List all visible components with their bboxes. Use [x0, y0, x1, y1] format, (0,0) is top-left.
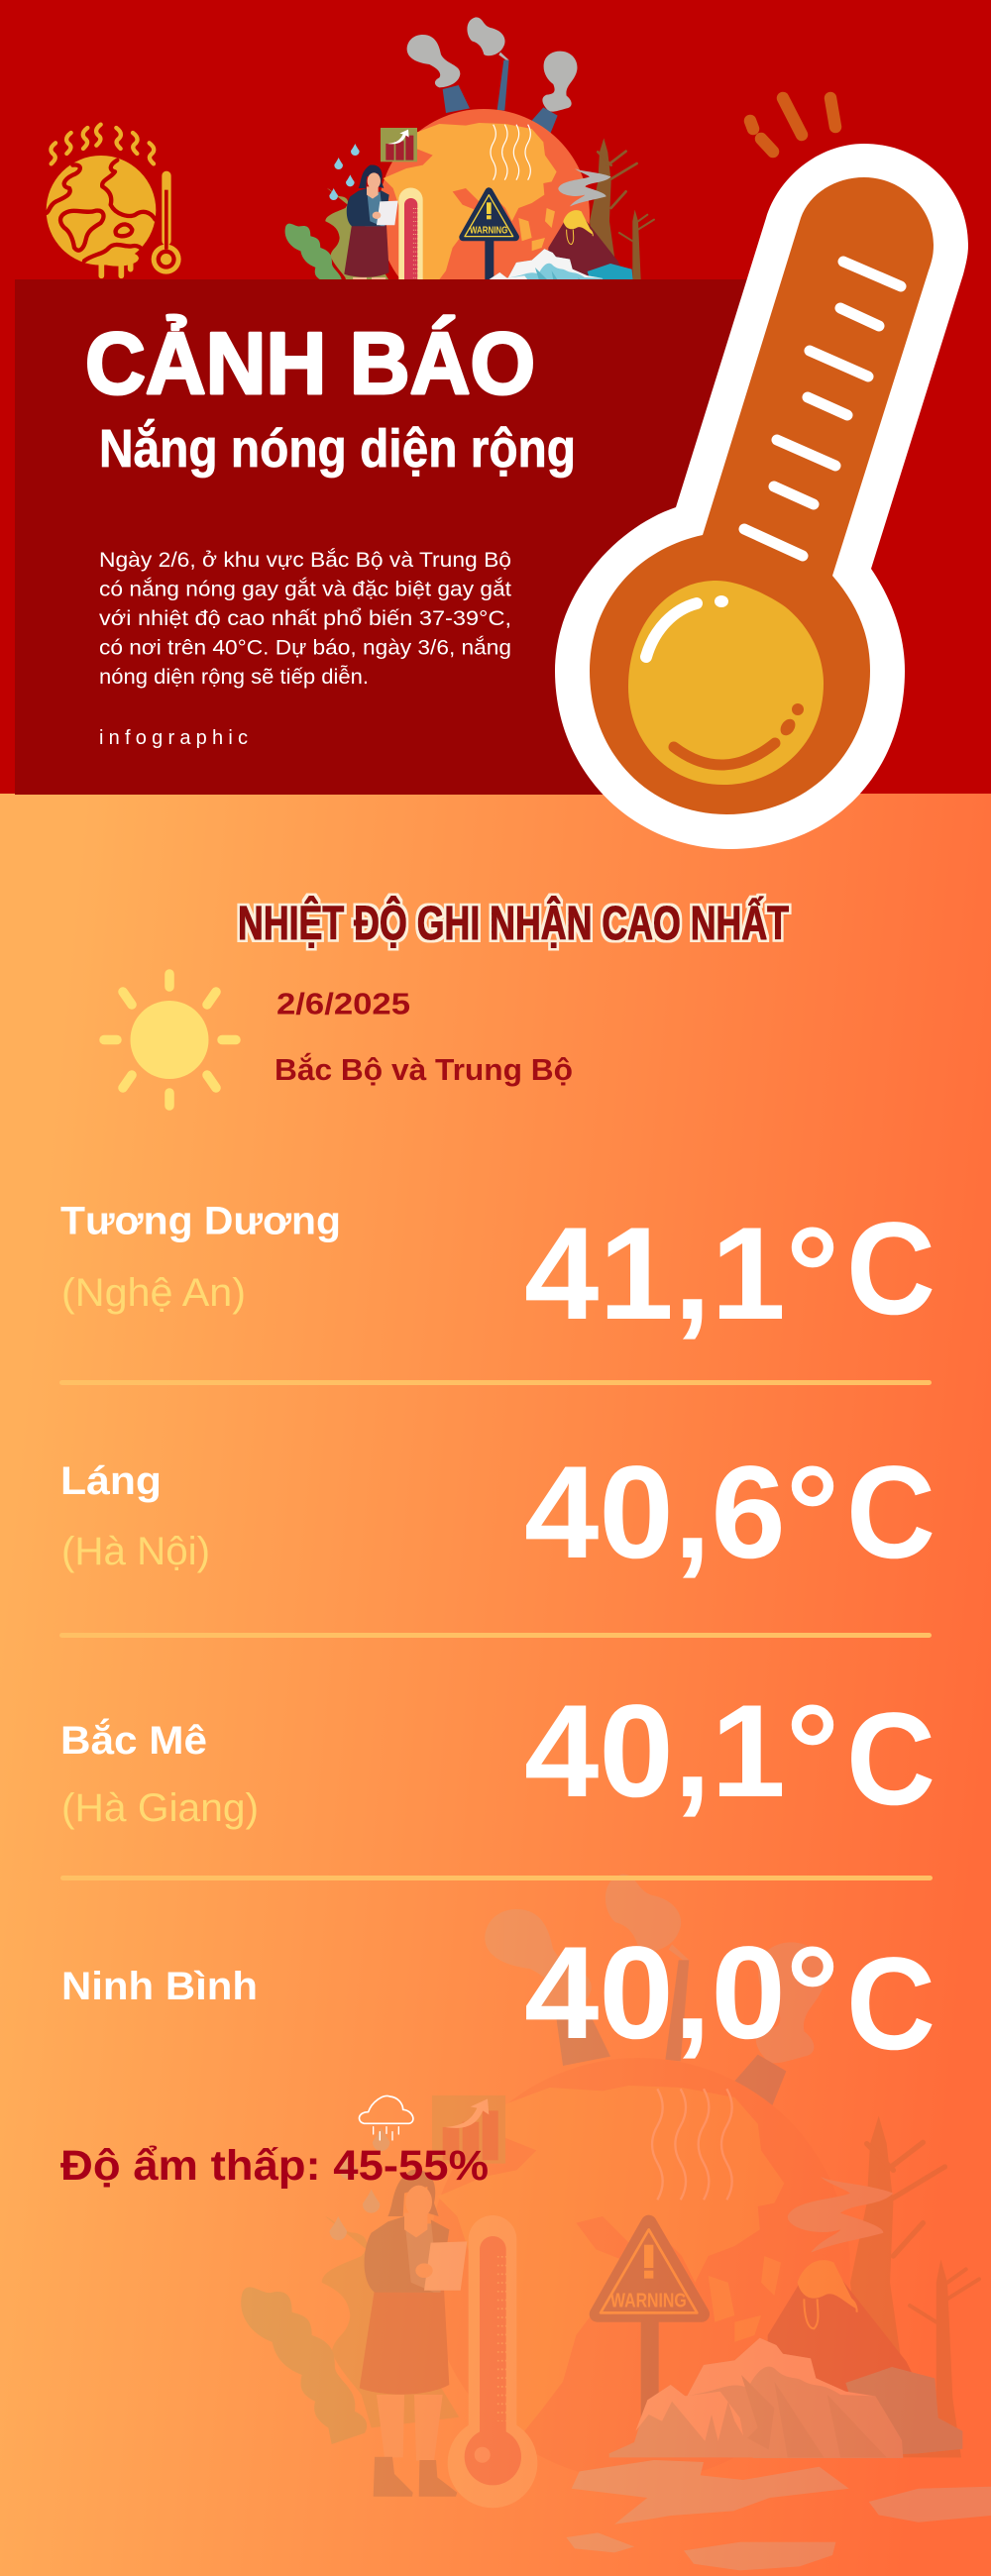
temperature unit: C: [846, 1196, 936, 1342]
water drops: [329, 144, 360, 200]
humidity note: Độ ẩm thấp: 45-55%: [60, 2142, 489, 2190]
thermometer white outline: [555, 144, 968, 849]
divider 2: [59, 1633, 932, 1638]
station name: Tương Dương: [60, 1199, 341, 1242]
panel: dark red intro: [15, 279, 773, 795]
small thermometer: [152, 171, 181, 274]
intro paragraph: nóng diện rộng sẽ tiếp diễn.: [99, 666, 369, 689]
row: Ninh Binh: [61, 1920, 936, 2078]
intro paragraph: Ngày 2/6, ở khu vực Bắc Bộ và Trung Bộ: [99, 549, 511, 572]
icon: melting globe with thermometer: [47, 125, 181, 275]
title: canh bao: CẢNH BÁO: [85, 314, 535, 412]
rising chart: [381, 128, 417, 161]
heat waves: [491, 125, 530, 180]
volcano smoke: [558, 168, 611, 206]
water puddles: [448, 310, 660, 366]
lower gradient background: [0, 794, 991, 2576]
temperature value: 41,1°: [524, 1201, 839, 1347]
intro paragraph: có nơi trên 40°C. Dự báo, ngày 3/6, nắng: [99, 636, 511, 660]
warning sign: [463, 191, 515, 304]
bulb highlights: [646, 595, 804, 765]
large thermometer: [388, 187, 433, 334]
icon: sun: [104, 974, 236, 1106]
station name: Bắc Mê: [60, 1717, 207, 1763]
volcano: [548, 210, 634, 294]
province: (Hà Giang): [61, 1786, 259, 1830]
province: (Nghệ An): [61, 1271, 246, 1315]
row: Lang: [60, 1440, 936, 1586]
continents: [384, 123, 557, 300]
temperature value: 40,0°: [524, 1920, 839, 2067]
date: 2/6/2025: [276, 987, 410, 1020]
row: Tuong Duong: [60, 1196, 936, 1347]
woman with clipboard: [344, 164, 398, 328]
infographic tag: infographic: [99, 727, 248, 749]
icon: thermometer sparks: [750, 98, 835, 152]
chimneys: [443, 60, 558, 135]
station name: Láng: [60, 1459, 162, 1503]
thermometer orange body: [590, 177, 934, 814]
globe body: [47, 156, 156, 266]
watermark: climate illustration: [241, 1875, 991, 2570]
earth globe: [379, 109, 590, 320]
row: Bac Me: [60, 1678, 936, 1833]
region: Bắc Bộ và Trung Bộ: [275, 1051, 573, 1087]
header background: [0, 0, 991, 795]
big thermometer: [555, 144, 968, 849]
temperature unit: C: [846, 1686, 936, 1833]
province: (Hà Nội): [61, 1530, 210, 1573]
thermometer scale ticks: [744, 262, 901, 556]
intro paragraph: với nhiệt độ cao nhất phổ biến 37-39°C,: [99, 607, 511, 630]
dead trees: [590, 138, 654, 309]
divider 3: [60, 1876, 933, 1880]
divider 1: [59, 1380, 932, 1385]
continents outline: [47, 161, 156, 261]
intro paragraph: [99, 549, 511, 689]
heat squiggles: [51, 125, 154, 163]
temperature value: 40,1°: [524, 1678, 839, 1825]
station name: Ninh Bình: [61, 1965, 258, 2008]
subtitle: Nắng nóng diện rộng: [99, 419, 576, 479]
thermometer bulb yellow: [628, 581, 824, 785]
temperature unit: C: [846, 1440, 936, 1586]
snowy mountains: [469, 249, 646, 309]
section heading: NHIỆT ĐỘ GHI NHẬN CAO NHẤT: [238, 896, 789, 950]
temperature value: 40,6°: [524, 1440, 839, 1586]
plants: [285, 188, 394, 302]
smoke plumes: [407, 17, 577, 112]
warning sign: WARNING: [470, 226, 507, 237]
icon: rain cloud: [359, 2095, 413, 2140]
illustration: global warming scene: [285, 17, 660, 366]
melting drips: [96, 251, 139, 275]
temperature unit: C: [846, 1931, 936, 2078]
intro paragraph: có nắng nóng gay gắt và đặc biệt gay gắt: [99, 579, 511, 600]
